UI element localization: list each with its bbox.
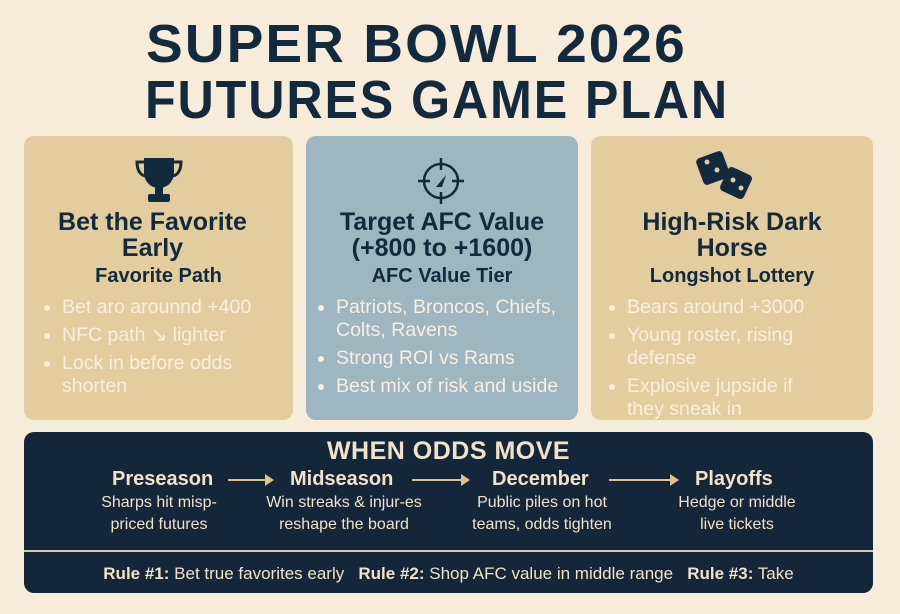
bullets: Best mix of risk and uside [336,375,558,397]
bullets: Explosive jupside if they sneak in [627,375,793,420]
heading [340,208,544,262]
description: playoffs: Hedge or middle [678,494,796,511]
panel: when odds move [24,432,873,593]
arrow [228,479,272,481]
icon: trophy [136,158,182,202]
heading: Bet the Favorite [58,208,247,236]
stage: december: December [492,468,589,490]
description: preseason: Sharps hit misp- [101,494,217,511]
panel: favorite [24,136,293,420]
description: midseason: Win streaks & injur-es [266,494,422,511]
bullets: Young roster, rising defense [627,324,793,369]
heading: WHEN ODDS MOVE [327,437,570,465]
bullets: Bet aro arounnd +400 [62,296,251,318]
bullets: Patriots, Broncos, Chiefs, Colts, Ravens [336,296,556,341]
description: playoffs: live tickets [700,516,774,533]
description: december [472,494,612,533]
arrow [609,479,677,481]
description: december: Public piles on hot [477,494,607,511]
description: midseason [266,494,422,533]
description: december: teams, odds tighten [472,516,612,533]
title: SUPER BOWL 2026 [146,14,687,74]
panel: AFC value [306,136,578,420]
stage: playoffs: Playoffs [695,468,773,490]
heading: Horse [697,234,767,262]
description: midseason: reshape the board [279,516,409,533]
stage: midseason: Midseason [290,468,393,490]
bullets: NFC path ↘ lighter [62,324,226,346]
bullets [318,296,558,397]
heading: (+800 to +1600) [352,234,532,262]
bullets [44,296,251,397]
icon: crosshair [418,158,464,204]
bullets: Bears around +3000 [627,296,804,318]
rules bar [24,550,873,584]
subheading: Favorite Path [95,265,222,287]
icon: dice [696,151,752,199]
description: preseason: priced futures [111,516,207,533]
description: preseason [101,494,217,533]
heading [58,208,247,262]
title [145,14,729,130]
heading: High-Risk Dark [642,208,822,236]
rules bar: Rule #1: Bet true favorites early Rule #2: Shop AFC value in middle range Rule #3: Take [103,564,794,583]
subheading: AFC Value Tier [372,265,512,287]
bullets: Lock in before odds shorten [62,352,232,397]
description: playoffs [678,494,796,533]
stage: preseason: Preseason [112,468,213,490]
panel: dark horse [591,136,873,420]
bullets: Strong ROI vs Rams [336,347,515,369]
heading: Target AFC Value [340,208,544,236]
title: FUTURES GAME PLAN [145,70,729,130]
subheading: Longshot Lottery [650,265,814,287]
arrow [412,479,468,481]
bullets [609,296,804,420]
heading [642,208,822,262]
heading: Early [122,234,183,262]
